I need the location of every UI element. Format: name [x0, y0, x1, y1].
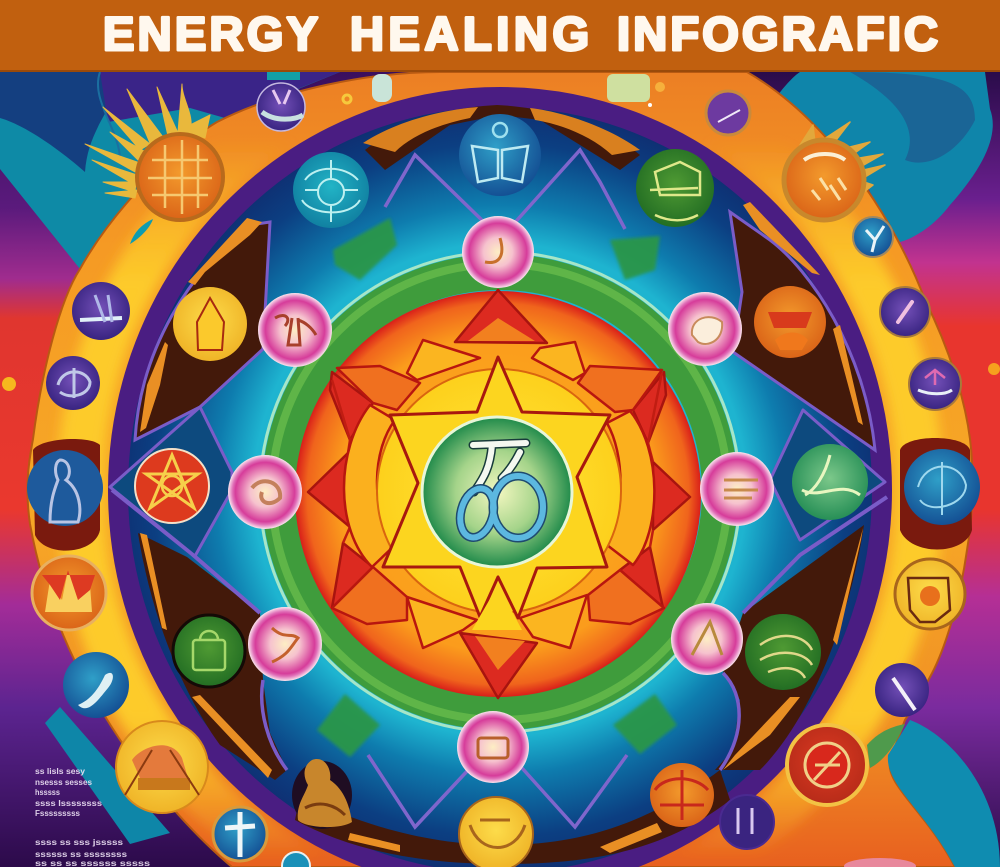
ring accents	[130, 72, 665, 244]
purple ring and inner field	[118, 97, 882, 867]
badge: right purple 2	[909, 358, 961, 410]
center symbol	[455, 443, 543, 541]
badge: lower right red	[787, 725, 867, 805]
brown wedge: lower right	[715, 497, 887, 770]
icon: seated figure	[292, 759, 352, 829]
badge: bottom left blue	[213, 807, 267, 861]
badge: large sun left	[137, 134, 223, 220]
small text block bottom left: ssssss ss ssssssss	[35, 850, 128, 859]
badge: teal web	[293, 152, 369, 228]
brown wedge: lower left	[112, 490, 287, 780]
right diamond panel	[770, 410, 885, 540]
small text block bottom left: nsesss sesses	[35, 778, 93, 787]
badge: large sun right	[784, 140, 864, 220]
badge: left lower blue	[63, 652, 129, 718]
diagonal orange petals	[332, 366, 664, 624]
title banner	[0, 0, 1000, 72]
pink node: lower right	[671, 603, 743, 675]
small orange dot right	[988, 363, 1000, 375]
small text block bottom left: ssss lssssssss	[35, 799, 103, 808]
badge: lower right purple	[875, 663, 929, 717]
green ring	[260, 252, 740, 732]
leaf: bottom right green	[867, 724, 905, 768]
badge: bottom right dark purple	[720, 795, 774, 849]
blob: bottom right pink	[844, 858, 916, 867]
badge: right large blue brain	[904, 449, 980, 525]
small text block bottom left: hsssss	[35, 788, 61, 797]
pink node: bottom	[457, 711, 529, 783]
green centre disc	[422, 417, 572, 567]
badge: upper right orange	[754, 286, 826, 358]
brown band: top	[363, 105, 640, 170]
inner yellow disc	[377, 369, 621, 613]
badge: lower left yellow altar	[116, 721, 208, 813]
six-pointed star	[383, 357, 610, 618]
swoosh: top left teal	[0, 72, 340, 269]
sun rays right	[800, 122, 885, 195]
badge: right upper blue	[853, 217, 893, 257]
badge: bottom orange	[650, 763, 714, 827]
pink node: upper right	[668, 292, 742, 366]
swoosh: bottom right teal	[888, 720, 1000, 867]
badge: right yellow	[895, 559, 965, 629]
swoosh: bottom left teal band	[45, 707, 170, 844]
sun rays left	[85, 84, 210, 198]
red outer petals	[308, 290, 690, 698]
green blocks	[317, 218, 677, 757]
badge: right green leaf	[792, 444, 868, 520]
mandala	[295, 290, 701, 698]
badge: lower right green	[745, 614, 821, 690]
small text block bottom left: ssss ss sss jsssss	[35, 838, 124, 847]
brown wedge: upper right	[730, 202, 875, 450]
small yellow dot left	[2, 377, 16, 391]
badge: bottom centre yellow	[459, 797, 533, 867]
pink node: top	[462, 216, 534, 288]
purple zigzag lines	[262, 150, 739, 827]
badge: lower left green	[173, 615, 245, 687]
brown wedge: upper left	[135, 218, 270, 440]
pink node: right	[700, 452, 774, 526]
side banana petals	[344, 405, 654, 567]
pink node: left	[228, 455, 302, 529]
swoosh: top right teal	[775, 72, 993, 242]
title	[103, 7, 938, 60]
badge: left large blue figure	[27, 450, 103, 526]
badge: bottom centre-left blue	[282, 852, 310, 867]
badge: left upper blue	[72, 282, 130, 340]
small yellow petals	[407, 340, 587, 648]
badge: left red star	[135, 449, 209, 523]
petal connecting lines	[332, 372, 662, 547]
badge: top left purple	[257, 83, 305, 131]
small text block bottom left: ss lisls sesy	[35, 767, 86, 776]
pink node: lower left	[248, 607, 322, 681]
badge: top right purple	[706, 91, 750, 135]
pink node: upper left	[258, 293, 332, 367]
ring inner yellow band	[80, 62, 920, 867]
badge: left orange	[32, 556, 106, 630]
badge: top green	[636, 149, 714, 227]
left diamond panel	[110, 407, 232, 556]
title: ENERGY	[103, 7, 318, 60]
badge: top blue figure	[459, 114, 541, 196]
small text block bottom left	[35, 767, 151, 867]
badge: left purple	[46, 356, 100, 410]
badge: yellow house	[173, 287, 247, 361]
title: INFOGRAFIC	[617, 7, 938, 60]
mandala disc	[295, 291, 701, 697]
brown band: bottom	[295, 770, 730, 864]
title: HEALING	[350, 7, 589, 60]
lower star notch	[472, 585, 522, 630]
badge: right purple 1	[880, 287, 930, 337]
small text block bottom left: Fsssssssss	[35, 809, 81, 818]
badge shadows: left and right	[33, 438, 972, 551]
orange petal centres	[468, 318, 535, 670]
